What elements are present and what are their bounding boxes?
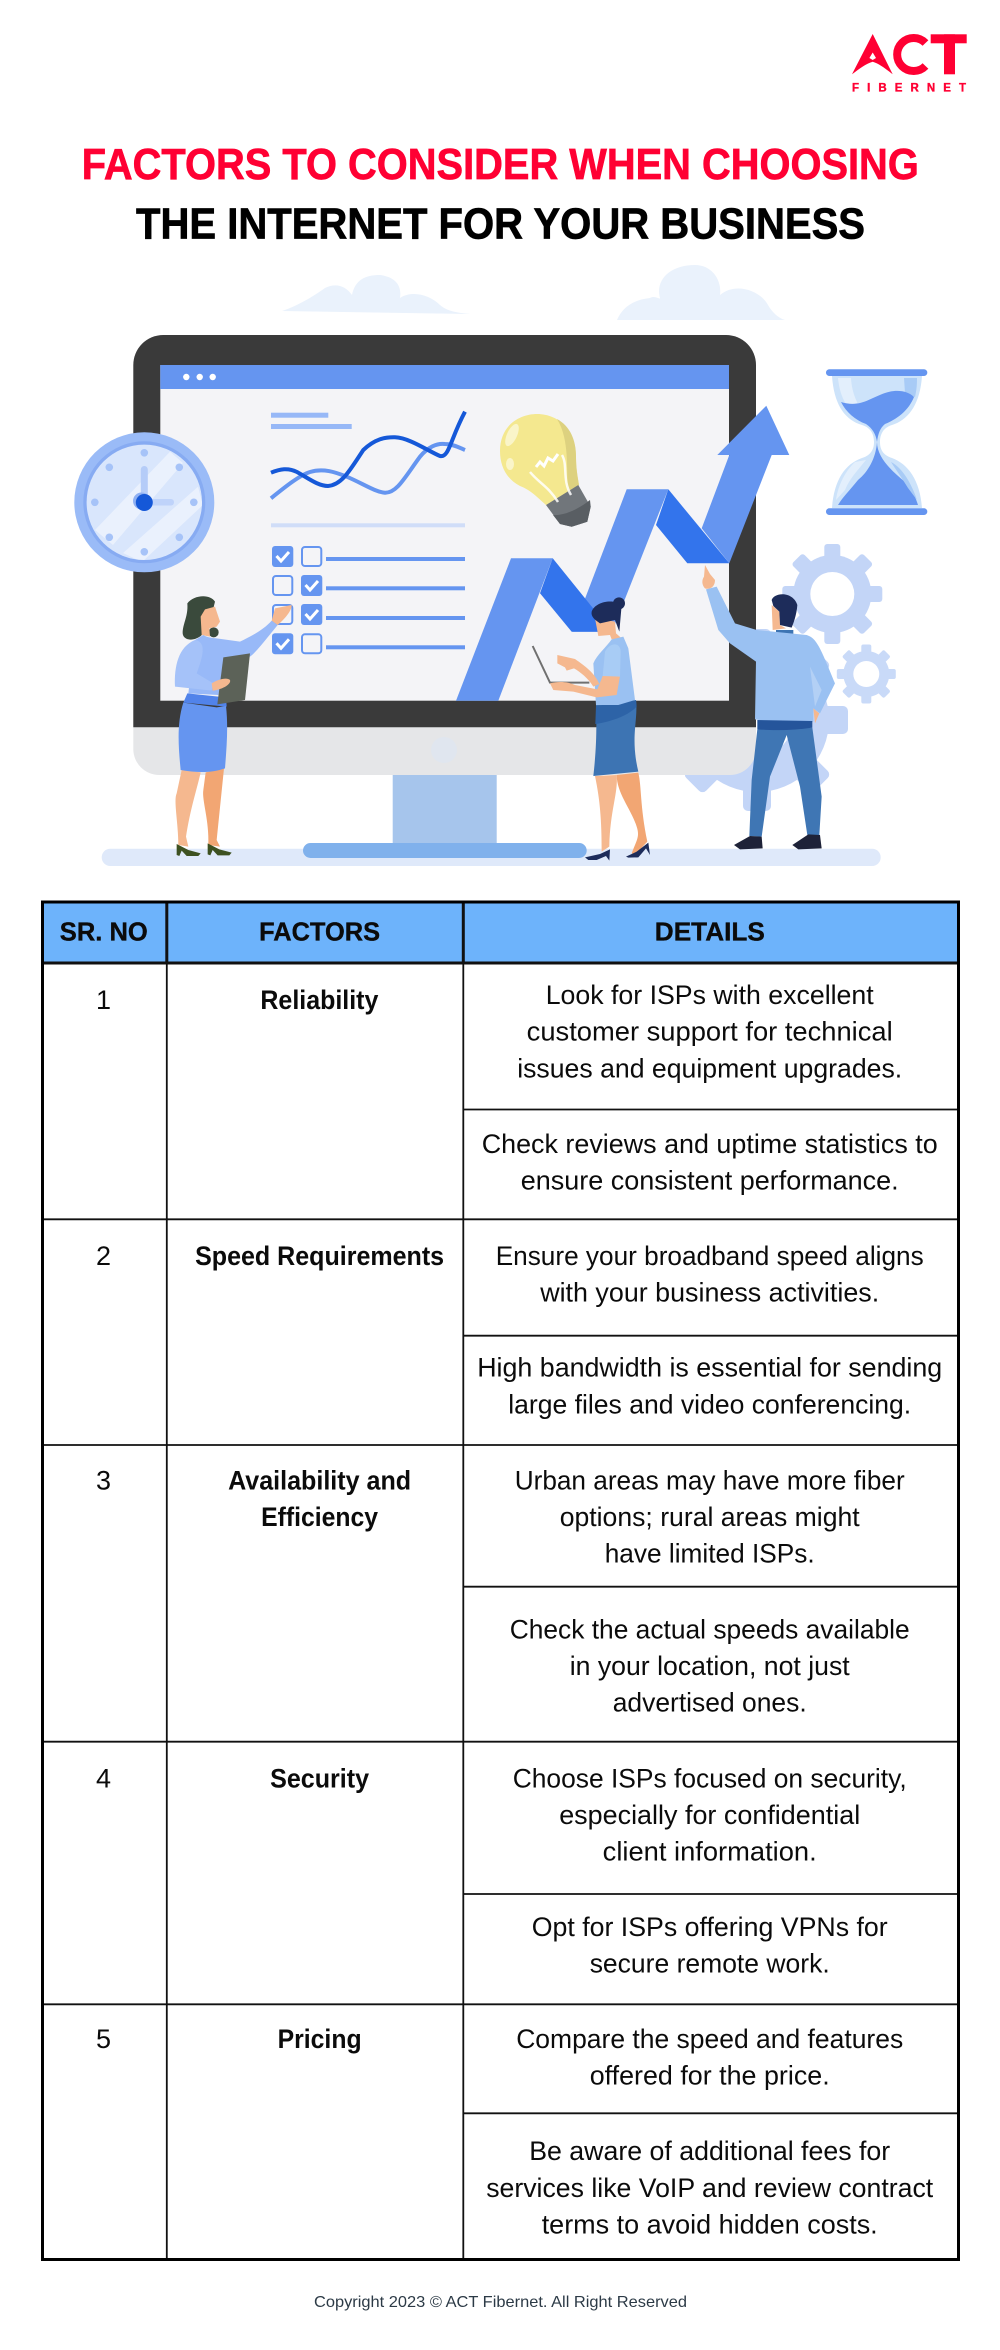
figure: woman with clipboard [175,596,292,856]
row 2: Speed Requirements [96,1241,942,1419]
icon: large gear behind the man [666,629,848,811]
row 5: Pricing [96,2024,934,2240]
row 4: Security: Choose ISPs focused on security, [513,1763,907,1793]
icon: ground strip [102,849,881,866]
figure: woman with laptop [533,597,650,861]
table [42,902,959,2260]
table header row: FACTORS [259,917,380,947]
row 1: Reliability: customer support for technical [527,1017,893,1047]
row 1: Reliability: Check reviews and uptime statistics to [482,1129,938,1159]
row 1: Reliability: Reliability [260,985,378,1015]
icon: hourglass [826,369,927,515]
row 3: Availability and Efficiency: 3 [96,1465,111,1495]
checklist [272,546,465,654]
row 3: Availability and Efficiency: options; rural areas might [560,1502,860,1532]
row 2: Speed Requirements: High bandwidth is essential for sending [477,1353,942,1383]
footer copyright: Copyright 2023 © ACT Fibernet. All Right Reserved [314,2294,687,2311]
logo: ACT Fibernet: FIBERNET [852,82,966,94]
row 4: Security: Opt for ISPs offering VPNs for [532,1912,888,1942]
row 2: Speed Requirements: with your business activities. [539,1278,879,1308]
row 4: Security: especially for confidential [559,1800,860,1830]
row 3: Availability and Efficiency [96,1465,910,1718]
row 3: Availability and Efficiency: Check the actual speeds available [510,1614,910,1644]
logo: ACT Fibernet [852,34,967,94]
row 2: Speed Requirements: Ensure your broadband speed aligns [496,1241,924,1271]
icon: light bulb [500,414,591,527]
title [82,140,919,249]
row 1: Reliability: Look for ISPs with excellent [546,980,874,1010]
table header row: SR. NO [60,917,148,947]
line chart [271,412,465,498]
row 5: Pricing: Compare the speed and features [516,2024,903,2054]
row 1: Reliability: 1 [96,985,111,1015]
row 2: Speed Requirements: Speed Requirements [195,1241,444,1271]
table header row [43,902,958,963]
icon: upper gear [782,544,882,644]
divider line [271,523,465,527]
title: FACTORS TO CONSIDER WHEN CHOOSING [82,140,919,189]
row 4: Security: client information. [603,1837,817,1867]
table grid lines [42,902,959,2260]
row 4: Security: 4 [96,1763,111,1793]
table header row: DETAILS [655,917,765,947]
row 5: Pricing: 5 [96,2024,111,2054]
row 5: Pricing: terms to avoid hidden costs. [542,2210,878,2240]
icon: left cloud [282,275,470,314]
icon: small gear [837,644,896,704]
row 3: Availability and Efficiency: have limited ISPs. [605,1539,815,1569]
row 2: Speed Requirements: large files and video conferencing. [508,1389,911,1419]
row 5: Pricing: services like VoIP and review contract [486,2173,934,2203]
row 3: Availability and Efficiency: in your location, not just [570,1651,850,1681]
title: THE INTERNET FOR YOUR BUSINESS [136,200,865,249]
row 5: Pricing: Pricing [278,2024,362,2054]
figure: man pointing at arrow [702,565,835,849]
icon: wall clock [74,432,214,572]
icon: monitor [133,335,756,858]
row 3: Availability and Efficiency: Availability and [228,1465,411,1495]
row 3: Availability and Efficiency: Urban areas may have more fiber [515,1465,905,1495]
row 3: Availability and Efficiency: advertised ones. [613,1688,807,1718]
row 4: Security: Security [270,1763,369,1793]
row 1: Reliability: issues and equipment upgrades. [517,1053,902,1083]
row 3: Availability and Efficiency: Efficiency [261,1502,378,1532]
growth arrow [456,406,789,701]
screen heading lines [271,413,352,429]
row 2: Speed Requirements: 2 [96,1241,111,1271]
illustration: monitor with presenters [74,265,927,866]
row 5: Pricing: Be aware of additional fees for [529,2136,890,2166]
row 4: Security: secure remote work. [590,1949,830,1979]
row 5: Pricing: offered for the price. [590,2061,830,2091]
row 4: Security [96,1763,907,1979]
row 1: Reliability: ensure consistent performance. [521,1166,899,1196]
icon: right cloud [617,265,785,320]
row 1: Reliability [96,980,938,1196]
